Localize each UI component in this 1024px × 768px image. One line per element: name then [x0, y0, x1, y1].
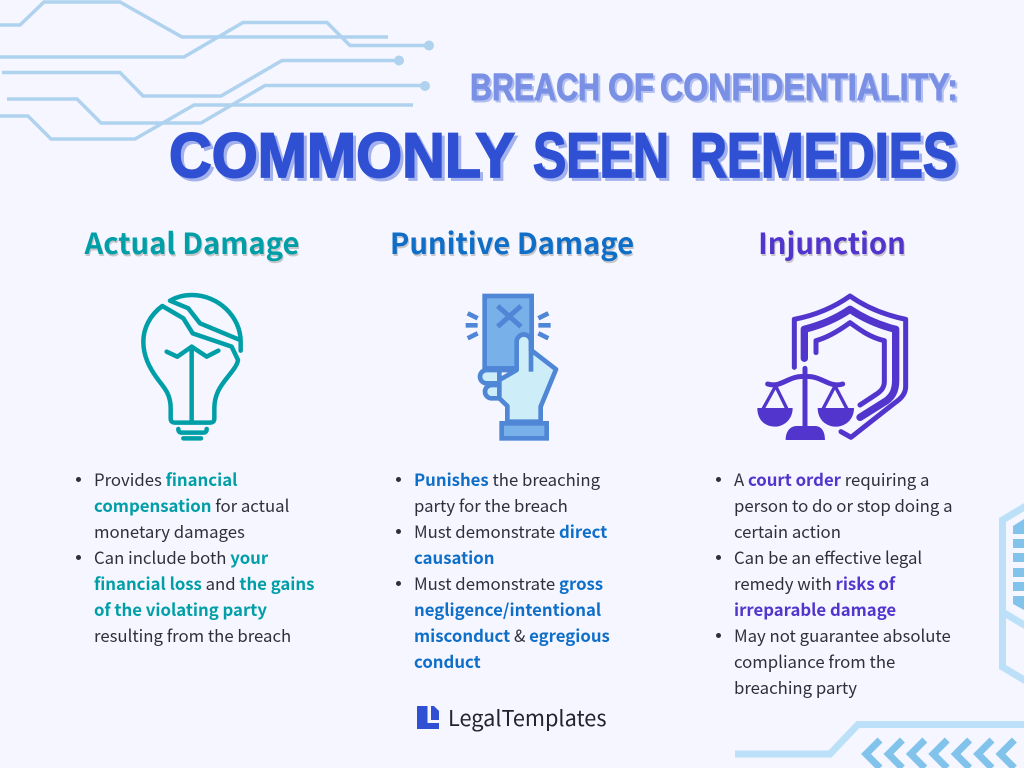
logo wordmark: LegalTemplates: [448, 702, 606, 733]
text block: Actual Damage points: Provides financial: [94, 467, 237, 491]
text block: Injunction points: breaching party: [734, 675, 857, 699]
text block: Punitive Damage points: Must demonstrate direct: [414, 519, 607, 543]
text block: Injunction points: remedy with risks of: [734, 571, 895, 595]
text block: Injunction points: [716, 467, 953, 699]
icon: shield and scales of justice: [757, 294, 908, 440]
text block: Punitive Damage points: negligence/intentional: [414, 597, 601, 621]
text block: Actual Damage points: Can include both your: [94, 545, 268, 569]
text block: Actual Damage points: monetary damages: [94, 519, 245, 543]
text block: Actual Damage points: [76, 467, 314, 647]
text block: Injunction points: May not guarantee absolute: [734, 623, 951, 647]
title: [169, 67, 960, 190]
text block: Injunction points: compliance from the: [734, 649, 895, 673]
icon: cracked light bulb: [141, 292, 243, 441]
title: SEEN: [533, 121, 669, 190]
text block: Punitive Damage points: party for the breach: [414, 493, 568, 517]
text block: Actual Damage points: of the violating party: [94, 597, 267, 621]
text block: Injunction points: A court order requiring a: [734, 467, 929, 491]
text block: Actual Damage points: resulting from the breach: [94, 623, 291, 647]
title: OF: [608, 67, 654, 109]
text block: Injunction points: irreparable damage: [734, 597, 896, 621]
text block: Punitive Damage points: [396, 467, 610, 673]
icon: LegalTemplates logo mark: [417, 706, 439, 729]
icon: hand holding penalty card: [466, 294, 558, 441]
text block: Actual Damage points: compensation for actual: [94, 493, 289, 517]
text block: Punitive Damage points: causation: [414, 545, 494, 569]
decoration: hexagon bottom right: [999, 503, 1024, 684]
title: BREACH: [472, 69, 602, 111]
title: OF: [610, 69, 656, 111]
text block: Actual Damage points: financial loss and the gains: [94, 571, 314, 595]
title: BREACH: [470, 67, 600, 109]
decoration: circuit lines top left: [0, 0, 434, 141]
text block: Injunction points: Can be an effective legal: [734, 545, 922, 569]
text block: Injunction points: certain action: [734, 519, 841, 543]
text block: Punitive Damage points: conduct: [414, 649, 481, 673]
title: COMMONLY: [169, 121, 515, 190]
heading: Actual Damage: Actual Damage: [84, 221, 300, 263]
text block: Punitive Damage points: Punishes the breaching: [414, 467, 600, 491]
text block: Injunction points: person to do or stop doing a: [734, 493, 953, 517]
heading: Punitive Damage: Punitive Damage: [390, 221, 634, 263]
text block: Punitive Damage points: misconduct & egregious: [414, 623, 610, 647]
text block: Punitive Damage points: Must demonstrate gross: [414, 571, 603, 595]
heading: Injunction: Injunction: [758, 221, 906, 263]
decoration: bottom circuit line and chevrons: [735, 721, 1024, 768]
